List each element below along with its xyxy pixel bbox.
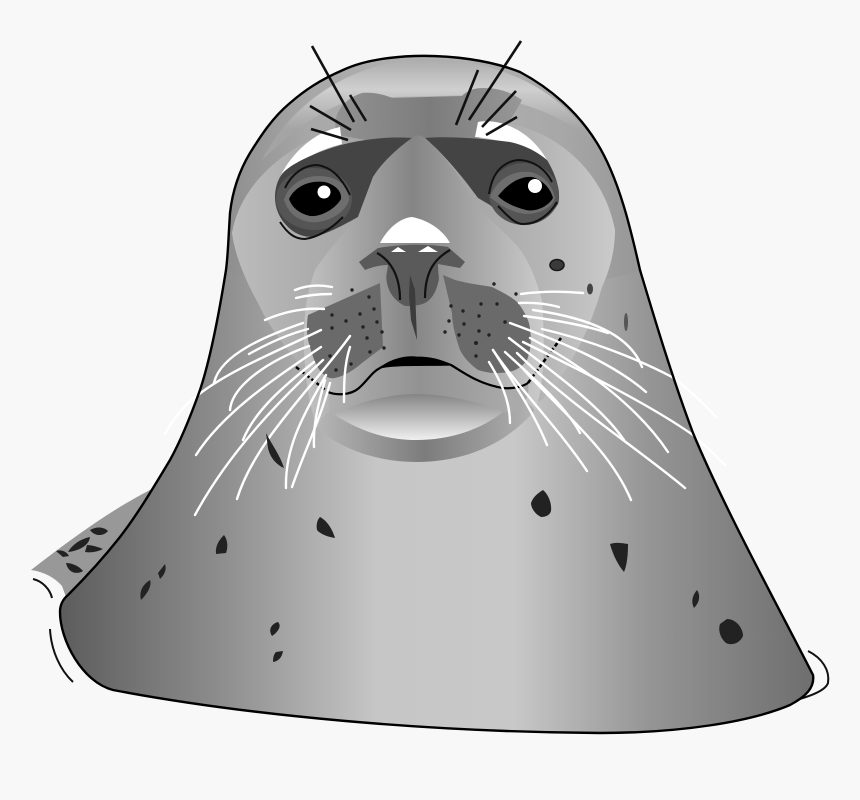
head highlight xyxy=(227,56,640,292)
white brow left xyxy=(280,127,342,177)
icon: left eye xyxy=(276,165,352,239)
face lighter panel xyxy=(232,122,615,413)
forehead dark patch xyxy=(335,88,522,150)
body spots xyxy=(140,433,743,662)
facial whiskers xyxy=(165,286,725,515)
chin xyxy=(317,383,535,462)
nose xyxy=(359,217,465,340)
white brow right xyxy=(475,121,547,160)
muzzle pads xyxy=(307,275,531,378)
whisker pores xyxy=(328,282,518,372)
upper lip area xyxy=(329,360,528,418)
mouth line xyxy=(296,338,561,394)
body outline xyxy=(60,56,813,733)
lower lip xyxy=(335,394,503,440)
flipper xyxy=(31,488,154,597)
muzzle cone xyxy=(304,135,544,427)
eyebrow whiskers xyxy=(310,41,521,140)
dome shine xyxy=(262,59,592,160)
dark eye mask xyxy=(275,137,559,237)
seal body xyxy=(60,56,813,733)
mole spots on face xyxy=(550,260,628,331)
water ripples xyxy=(33,579,828,702)
icon: right eye xyxy=(489,160,559,225)
